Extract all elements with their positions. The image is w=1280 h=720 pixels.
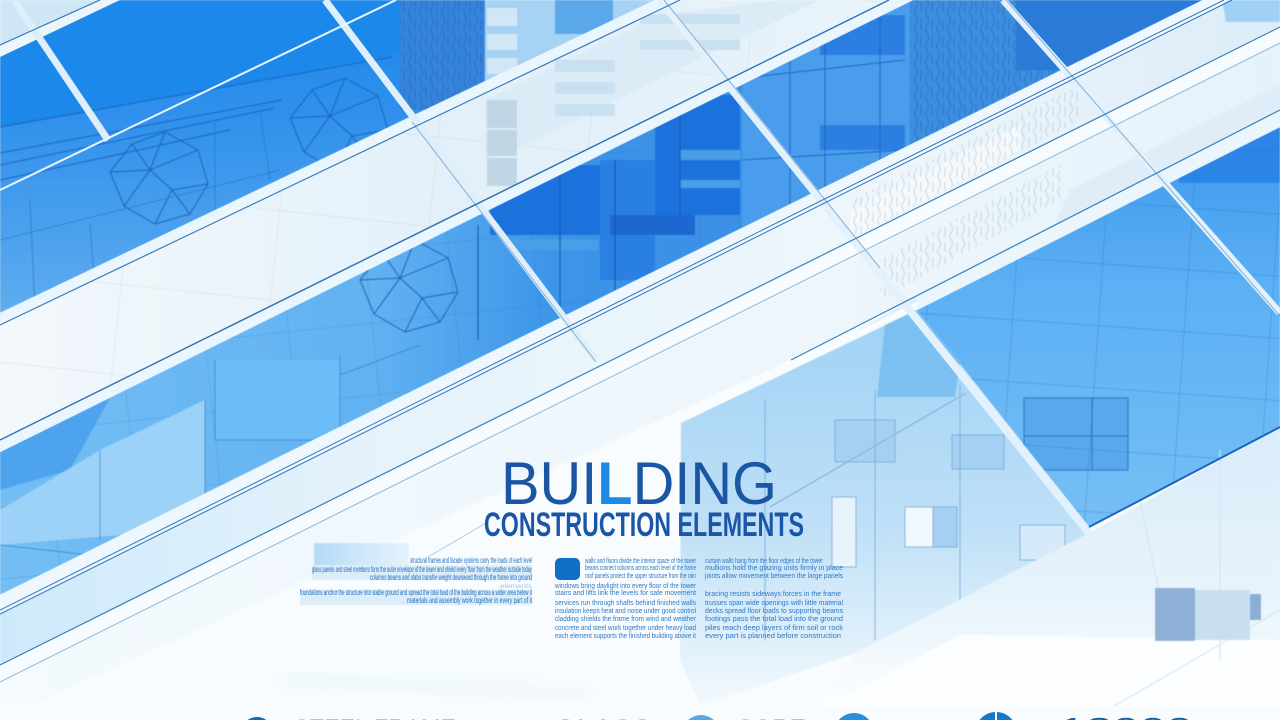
heading block bbox=[484, 450, 804, 544]
pale tower at top centre bbox=[484, 0, 654, 82]
strip above right facade bbox=[917, 110, 1280, 310]
text block: left caption: structural frames and facade systems carry the loads of each level bbox=[410, 556, 532, 565]
text block: right column: trusses span wide openings with little material bbox=[705, 600, 843, 607]
panel: lower right pale facade bbox=[800, 427, 1280, 720]
streak tower bbox=[910, 0, 1049, 144]
text block: right column: mullions hold the glazing units firmly in place bbox=[705, 565, 843, 572]
crossing struts bbox=[14, 0, 108, 140]
darker glass at left edge bbox=[0, 398, 110, 490]
upper right window block bbox=[742, 2, 910, 226]
title: BUILDING bbox=[501, 450, 777, 517]
text block: right column: piles reach deep layers of firm soil or rock bbox=[705, 625, 844, 632]
text block: left caption: glass panels and steel members form the outer envelope of the tower and shield every floor from the weather outside today bbox=[312, 565, 532, 574]
panel: lower building, faded blue bbox=[680, 310, 1089, 705]
text block: centre column: each element supports the finished building above it bbox=[555, 633, 696, 640]
text block: centre column: windows bring daylight into every floor of the tower bbox=[554, 583, 697, 590]
pale smear near bottom bbox=[270, 675, 600, 696]
text block: left caption: foundations anchor the structure into stable ground and spread the total load of the building across a wider area below it bbox=[300, 588, 532, 597]
panel: right blue facade bbox=[916, 127, 1280, 526]
text block: centre column: beams connect columns across each level of the frame bbox=[585, 565, 696, 572]
building windows bbox=[765, 310, 1065, 640]
dark window block bbox=[490, 95, 740, 280]
text block: centre column: services run through shafts behind finished walls bbox=[555, 600, 696, 607]
text block: right column bbox=[704, 558, 844, 640]
text block: left caption bbox=[300, 556, 532, 605]
text block: left caption: elements bbox=[500, 584, 532, 590]
text block: centre column: stairs and lifts link the levels for safe movement bbox=[555, 590, 696, 597]
thin white diagonal bbox=[0, 0, 396, 190]
band edge lines bbox=[0, 0, 100, 45]
text block: right column: bracing resists sideways forces in the frame bbox=[705, 591, 841, 598]
upper-left corner strip bbox=[0, 0, 120, 57]
text block: centre column: roof panels protect the upper structure from the rain bbox=[585, 573, 696, 580]
upper band edge strip bbox=[0, 0, 680, 325]
text block: left caption: columns beams and slabs transfer weight downward through the frame into ground bbox=[370, 573, 532, 582]
panel: lower right white wedge bbox=[800, 635, 1280, 720]
text block: centre column: cladding shields the frame from wind and weather bbox=[555, 616, 697, 623]
text block: right column: joints allow movement between the large panels bbox=[704, 573, 843, 580]
text block: right column: curtain walls hang from the floor edges of the tower bbox=[705, 558, 823, 565]
wire mesh bbox=[110, 132, 208, 224]
panel: pale building behind caption bbox=[314, 543, 409, 569]
footer labels, cropped by the page edge bbox=[294, 712, 1193, 720]
lower right windows bbox=[1155, 588, 1261, 641]
text block: centre column: insulation keeps heat and noise under good control bbox=[555, 608, 696, 615]
lower mesh bbox=[360, 240, 458, 332]
text block: centre column bbox=[554, 558, 697, 640]
subtitle: CONSTRUCTION ELEMENTS bbox=[484, 506, 804, 544]
text block: centre column: concrete and steel work together under heavy load bbox=[555, 625, 696, 632]
text block: right column: every part is planned before construction bbox=[705, 633, 841, 640]
pale stepped building at left bbox=[0, 400, 205, 545]
footer icons, cropped by the page edge bbox=[248, 712, 1012, 720]
panel: upper diagonal pale band bbox=[0, 0, 889, 440]
pale tower windows inside upper band bbox=[485, 0, 820, 186]
dark streaked tower bbox=[400, 0, 485, 110]
text block: right column: footings pass the total load into the ground bbox=[705, 616, 843, 623]
bright blue glass cell bbox=[0, 40, 400, 126]
text block: right column: decks spread floor loads to supporting beams bbox=[705, 608, 843, 615]
panel: top-left blue facade bbox=[0, 0, 660, 325]
text block: left caption: materials and assembly work together in every part of it bbox=[407, 596, 532, 605]
panel: upper-left corner pale glass bbox=[0, 0, 100, 45]
text block: centre column: walls and floors divide the interior space of the tower bbox=[584, 558, 696, 565]
icon: blue rounded square bbox=[555, 558, 580, 580]
lower edge of upper band bbox=[0, 0, 913, 452]
